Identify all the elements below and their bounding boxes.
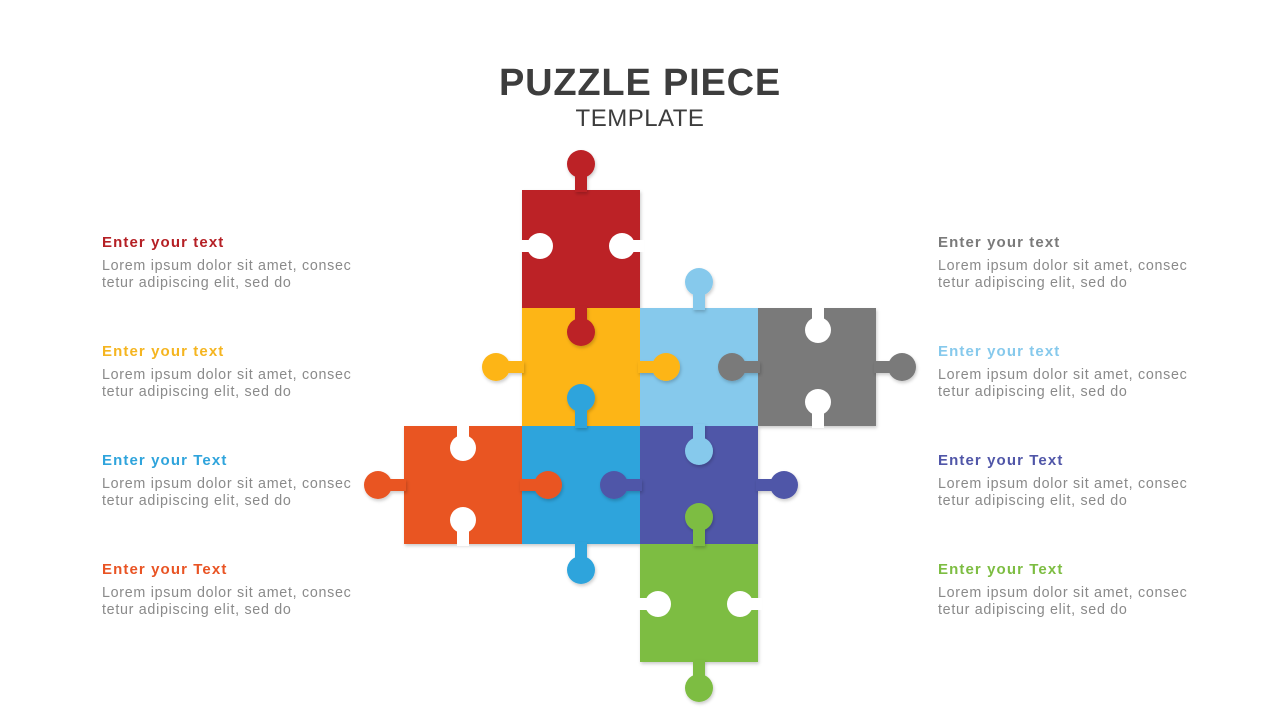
text block: yellow [102, 343, 351, 400]
text block: light blue: Lorem ipsum dolor sit amet, consec [938, 367, 1187, 383]
text block: light blue: tetur adipiscing elit, sed do [938, 384, 1128, 400]
text block: light blue: Enter your text [938, 343, 1060, 360]
subtitle: TEMPLATE [576, 105, 704, 132]
text block: red: Lorem ipsum dolor sit amet, consec [102, 258, 351, 274]
text block: orange [102, 561, 351, 618]
knobs [364, 150, 916, 702]
text block: red [102, 234, 351, 291]
text block: light blue [938, 343, 1187, 400]
holes [450, 233, 831, 617]
text block: yellow: Enter your text [102, 343, 224, 360]
text block: green: tetur adipiscing elit, sed do [938, 602, 1128, 618]
text block: purple [938, 452, 1187, 509]
text block: yellow: tetur adipiscing elit, sed do [102, 384, 292, 400]
text block: blue: Lorem ipsum dolor sit amet, consec [102, 476, 351, 492]
text block: green: Enter your Text [938, 561, 1063, 578]
title: PUZZLE PIECE [499, 62, 781, 104]
text block: gray [938, 234, 1187, 291]
text block: yellow: Lorem ipsum dolor sit amet, consec [102, 367, 351, 383]
text block: blue: Enter your Text [102, 452, 227, 469]
text block: red: Enter your text [102, 234, 224, 251]
text block: orange: Lorem ipsum dolor sit amet, consec [102, 585, 351, 601]
text block: green: Lorem ipsum dolor sit amet, consec [938, 585, 1187, 601]
text block: orange: tetur adipiscing elit, sed do [102, 602, 292, 618]
text block: purple: Lorem ipsum dolor sit amet, consec [938, 476, 1187, 492]
text block: purple: tetur adipiscing elit, sed do [938, 493, 1128, 509]
text block: blue [102, 452, 351, 509]
piece bodies [522, 190, 640, 308]
text block: gray: Enter your text [938, 234, 1060, 251]
text block: red: tetur adipiscing elit, sed do [102, 275, 292, 291]
text block: blue: tetur adipiscing elit, sed do [102, 493, 292, 509]
text block: orange: Enter your Text [102, 561, 227, 578]
text block: gray: Lorem ipsum dolor sit amet, consec [938, 258, 1187, 274]
text block: gray: tetur adipiscing elit, sed do [938, 275, 1128, 291]
text block: green [938, 561, 1187, 618]
text block: purple: Enter your Text [938, 452, 1063, 469]
